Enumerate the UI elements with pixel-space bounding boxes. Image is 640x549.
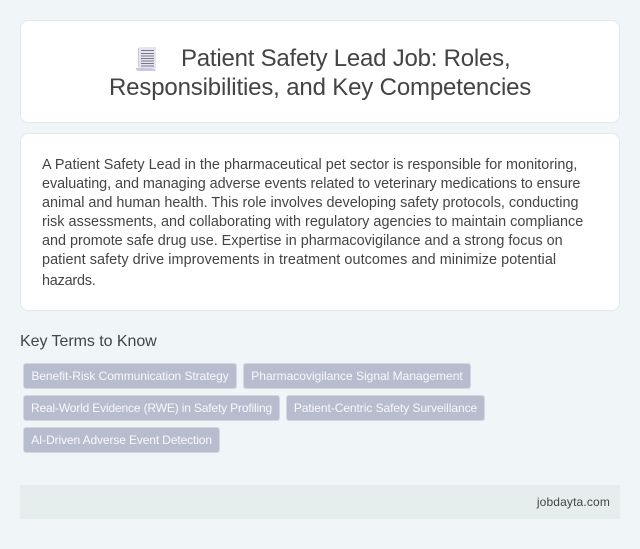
description text: risk assessments, and collaborating with regulatory agencies to maintain compliance — [42, 214, 583, 230]
description text: and promote safe drug use. Expertise in pharmacovigilance and a strong focus on — [42, 233, 563, 249]
description text: evaluating, and managing adverse events related to veterinary medications to ensure — [42, 176, 580, 192]
tag: benefit-risk — [23, 363, 237, 389]
tag: signal management — [243, 363, 471, 389]
tag: patient-centric: Patient-Centric Safety Surveillance — [294, 401, 477, 415]
description text: hazards. — [42, 273, 96, 289]
tag: AI-driven — [23, 427, 220, 453]
heading: key terms: Key Terms to Know — [20, 333, 157, 350]
title line 1: Patient Safety Lead Job: Roles, — [181, 45, 510, 72]
icon: document scroll — [136, 47, 156, 71]
panel: description card — [20, 133, 620, 310]
description text: patient safety drive improvements in treatment outcomes and minimize potential — [42, 252, 556, 268]
footer bar — [20, 485, 620, 519]
description text: animal and human health. This role involves developing safety protocols, conducting — [42, 195, 579, 211]
tag: AI-driven: AI-Driven Adverse Event Detection — [31, 433, 212, 447]
title line 2: Responsibilities, and Key Competencies — [109, 74, 531, 101]
tag: benefit-risk: Benefit-Risk Communication Strategy — [31, 369, 229, 383]
description text: A Patient Safety Lead in the pharmaceutical pet sector is responsible for monitoring, — [42, 157, 577, 173]
footer text: jobdayta.com — [537, 495, 610, 509]
tag: real-world evidence: Real-World Evidence (RWE) in Safety Profiling — [31, 401, 272, 415]
tag: patient-centric — [286, 395, 485, 421]
description text — [42, 157, 583, 289]
tag: real-world evidence — [23, 395, 280, 421]
tag: signal management: Pharmacovigilance Signal Management — [251, 369, 463, 383]
panel: title card — [20, 20, 620, 122]
